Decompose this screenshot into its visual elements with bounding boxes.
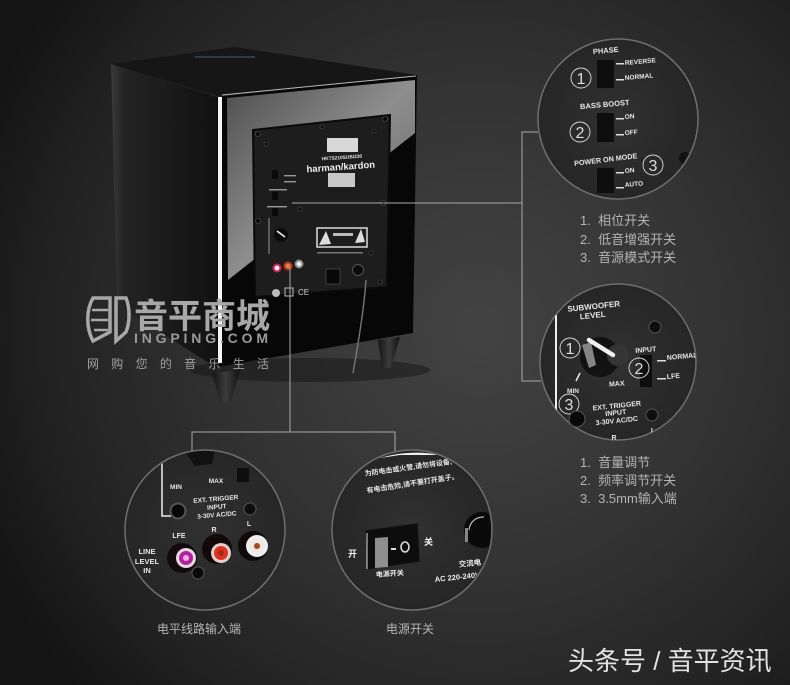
trigger label: EXT. TRIGGER bbox=[193, 494, 239, 505]
number two bbox=[629, 358, 649, 378]
switch label: 电源开关 bbox=[376, 568, 404, 579]
watermark url: INGPING.COM bbox=[134, 330, 268, 346]
trigger label: EXT. TRIGGER bbox=[592, 400, 641, 413]
number one bbox=[560, 338, 580, 358]
warning strip bbox=[319, 229, 365, 245]
input switch bbox=[640, 355, 652, 387]
spec label bbox=[328, 173, 355, 187]
volume area line bbox=[268, 218, 270, 254]
on arrow 2 bbox=[616, 172, 624, 174]
top white sliver bbox=[380, 453, 440, 458]
power mode switch bbox=[597, 168, 614, 193]
trigger input word: INPUT bbox=[605, 409, 627, 418]
power switch bbox=[326, 269, 340, 284]
on label: ON bbox=[625, 113, 635, 121]
rear foot bbox=[378, 337, 400, 368]
cable bbox=[353, 280, 366, 373]
logo mark bbox=[88, 298, 129, 341]
circle detail: mode switches bbox=[538, 39, 698, 199]
back plate bbox=[253, 115, 390, 297]
callout lines bbox=[192, 132, 541, 452]
min label: MIN bbox=[567, 388, 579, 395]
top logo bbox=[195, 56, 255, 58]
caption: power switch: 电源开关 bbox=[386, 622, 434, 636]
circle detail: power switch bbox=[332, 450, 500, 610]
list two bbox=[580, 455, 677, 506]
r label: R bbox=[211, 527, 217, 534]
max label: MAX bbox=[609, 380, 625, 389]
l label: L bbox=[247, 521, 252, 528]
r jack bbox=[202, 534, 232, 564]
jack bbox=[170, 504, 186, 518]
power mode label: POWER ON MODE bbox=[574, 151, 638, 168]
list one: 3. 音源模式开关 bbox=[580, 250, 676, 265]
number two digit: 2 bbox=[576, 125, 585, 142]
r label: R bbox=[611, 435, 617, 442]
watermark slogan: 网购您的音乐生活 bbox=[87, 356, 269, 371]
number one digit: 1 bbox=[577, 71, 586, 88]
circle detail: line level input bbox=[125, 450, 285, 610]
list two: 3. 3.5mm输入端 bbox=[580, 491, 677, 506]
front foot bbox=[212, 370, 240, 402]
on label 2: ON bbox=[625, 167, 635, 175]
trigger voltage: 3-30V AC/DC bbox=[197, 510, 237, 521]
watermark title: 音平商城 bbox=[134, 298, 270, 336]
l jack bbox=[238, 531, 268, 561]
number three bbox=[559, 394, 579, 414]
min tick bbox=[576, 373, 580, 381]
cabinet left side bbox=[111, 64, 217, 368]
level word: LEVEL bbox=[135, 557, 160, 566]
phase switch bbox=[597, 60, 614, 88]
in word: IN bbox=[143, 566, 151, 575]
RCA inputs bbox=[274, 260, 302, 272]
cord bbox=[465, 528, 468, 542]
rocker switch bbox=[365, 523, 420, 570]
off arrow bbox=[616, 134, 624, 136]
normal arrow bbox=[657, 360, 666, 362]
subwoofer level label: SUBWOOFER bbox=[567, 299, 621, 314]
socket highlight bbox=[469, 517, 484, 530]
watermark logo bbox=[87, 298, 270, 371]
jack bbox=[569, 411, 585, 427]
list one: 2. 低音增强开关 bbox=[580, 232, 676, 247]
number two digit: 2 bbox=[635, 361, 644, 378]
model number: HKTS210SUB/230 bbox=[322, 154, 363, 162]
list one: 1. 相位开关 bbox=[580, 213, 650, 228]
reverse arrow bbox=[616, 63, 624, 64]
top knob remnant bbox=[185, 450, 215, 466]
power socket bbox=[464, 512, 500, 548]
ac label: 交流电 bbox=[458, 557, 482, 569]
floor shadow bbox=[190, 358, 430, 382]
volume knob bbox=[274, 228, 288, 242]
model label bbox=[327, 138, 358, 152]
cabinet back bbox=[217, 75, 417, 367]
number one bbox=[571, 68, 591, 88]
max label: MAX bbox=[209, 478, 224, 485]
brand name: harman/kardon bbox=[306, 160, 376, 175]
l label: L bbox=[651, 428, 656, 435]
number three digit: 3 bbox=[565, 397, 574, 414]
off label: 开 bbox=[348, 549, 357, 559]
volume knob pointer bbox=[277, 231, 285, 237]
auto label: AUTO bbox=[625, 180, 643, 189]
source credit: 头条号 / 音平资讯 bbox=[568, 646, 772, 676]
ac voltage: AC 220-240V bbox=[434, 570, 480, 584]
auto arrow bbox=[616, 187, 624, 188]
panel line bbox=[162, 460, 171, 516]
reverse label: REVERSE bbox=[625, 57, 657, 67]
warning label bbox=[317, 228, 367, 247]
white corner highlight bbox=[218, 97, 222, 363]
off label: OFF bbox=[625, 129, 638, 137]
on label: 关 bbox=[424, 536, 433, 547]
normal arrow bbox=[616, 79, 624, 80]
certification marks bbox=[272, 288, 309, 297]
warning text lines bbox=[317, 252, 363, 254]
top edge highlight bbox=[222, 76, 416, 95]
normal label: NORMAL bbox=[625, 73, 654, 82]
screw bbox=[649, 321, 661, 333]
number one digit: 1 bbox=[566, 341, 575, 358]
lfe label: LFE bbox=[172, 533, 186, 540]
number two bbox=[570, 122, 590, 142]
knob bbox=[580, 337, 618, 377]
number three bbox=[643, 155, 663, 175]
line level label: LINE bbox=[138, 547, 156, 556]
phase label: PHASE bbox=[593, 45, 619, 56]
normal label: NORMAL bbox=[667, 352, 698, 362]
gloss reflection bbox=[227, 80, 415, 280]
input switch bbox=[237, 468, 249, 482]
list one bbox=[580, 213, 676, 265]
trigger voltage: 3-30V AC/DC bbox=[595, 416, 638, 427]
screw two bbox=[646, 409, 658, 421]
warning line one: 为防电击或火警,请勿将设备, bbox=[364, 457, 452, 478]
caption: line input: 电平线路输入端 bbox=[157, 621, 241, 636]
switches bbox=[267, 170, 296, 216]
lfe arrow bbox=[657, 378, 666, 380]
number three digit: 3 bbox=[649, 158, 658, 175]
on arrow bbox=[616, 118, 624, 120]
input label: INPUT bbox=[635, 346, 657, 355]
bass switch bbox=[597, 113, 614, 142]
certification marks: CE bbox=[298, 288, 309, 297]
lfe jack bbox=[167, 543, 197, 573]
min label: MIN bbox=[170, 484, 182, 491]
cabinet top bbox=[111, 47, 417, 96]
list two: 1. 音量调节 bbox=[580, 455, 650, 470]
power socket bbox=[352, 264, 364, 276]
warning line two: 有电击危险,请不要打开盖子。 bbox=[366, 472, 459, 495]
list two: 2. 频率调节开关 bbox=[580, 473, 676, 488]
level word: LEVEL bbox=[579, 310, 606, 321]
panel white line bbox=[555, 315, 557, 413]
lfe label: LFE bbox=[667, 373, 681, 381]
plate screws bbox=[256, 116, 388, 284]
circle detail: level controls bbox=[540, 284, 698, 442]
subwoofer product photo bbox=[111, 47, 430, 402]
screw bottom bbox=[192, 567, 204, 579]
trigger input: INPUT bbox=[207, 503, 227, 512]
bass boost label: BASS BOOST bbox=[580, 98, 630, 111]
screw bbox=[679, 152, 689, 164]
screw bbox=[244, 503, 256, 515]
